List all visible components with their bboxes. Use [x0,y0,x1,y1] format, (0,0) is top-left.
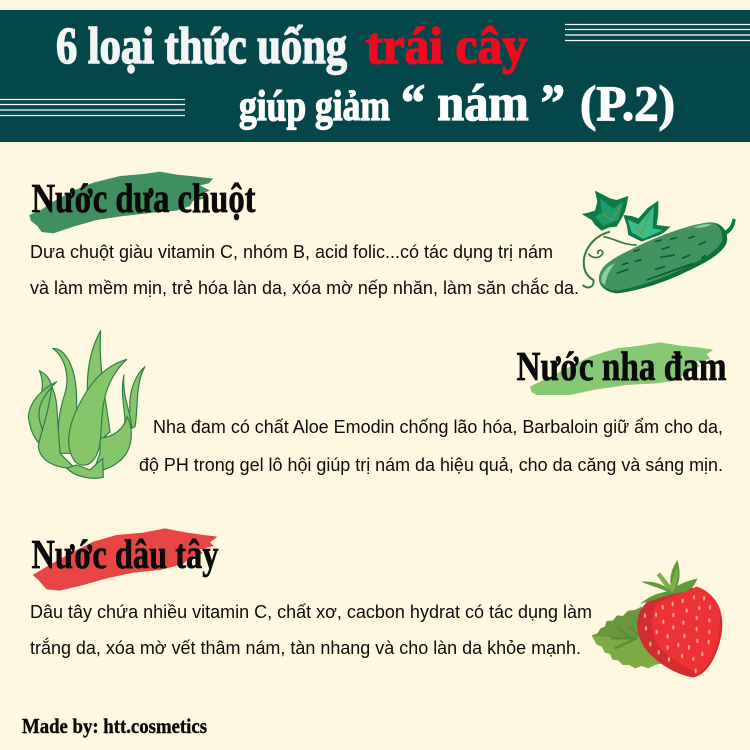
body text: và làm mềm mịn, trẻ hóa làn da, xóa mờ nếp nhăn, làm săn chắc da. [30,277,579,298]
body text: Nha đam có chất Aloe Emodin chống lão hóa, Barbaloin giữ ẩm cho da, [153,416,723,437]
body text: trắng da, xóa mờ vết thâm nám, tàn nhang và cho làn da khỏe mạnh. [30,637,581,658]
header banner [0,10,750,142]
section: cucumber juice [29,172,736,298]
icon: strawberry [592,560,722,677]
body text [30,241,579,298]
title line 2 [239,75,675,132]
credit: made by: Made by: htt.cosmetics [22,714,207,738]
title line 2: (P.2) [580,75,675,131]
section: strawberry juice [30,528,722,677]
title line 2: “ nám ” [401,75,565,132]
heading: Nước dưa chuột: Nước dưa chuột [32,175,256,221]
heading: Nước dâu tây: Nước dâu tây [32,531,219,577]
body text: độ PH trong gel lô hội giúp trị nám da hiệu quả, cho da căng và sáng mịn. [139,454,723,475]
body text [139,416,723,475]
brush stroke: light green [530,342,713,395]
body text [30,601,592,658]
section: aloe juice [28,331,727,478]
title line 2: giúp giảm [239,83,390,130]
body text: Dâu tây chứa nhiều vitamin C, chất xơ, cacbon hydrat có tác dụng làm [30,601,592,622]
brush stroke: red [33,528,217,591]
title line 1: 6 loại thức uống [56,18,347,75]
icon: cucumber [582,191,736,293]
brush stroke: dark green [29,172,213,233]
icon: aloe plant [28,331,145,478]
body text: Dưa chuột giàu vitamin C, nhóm B, acid folic...có tác dụng trị nám [30,241,553,262]
title line 1: trái cây [366,18,527,75]
